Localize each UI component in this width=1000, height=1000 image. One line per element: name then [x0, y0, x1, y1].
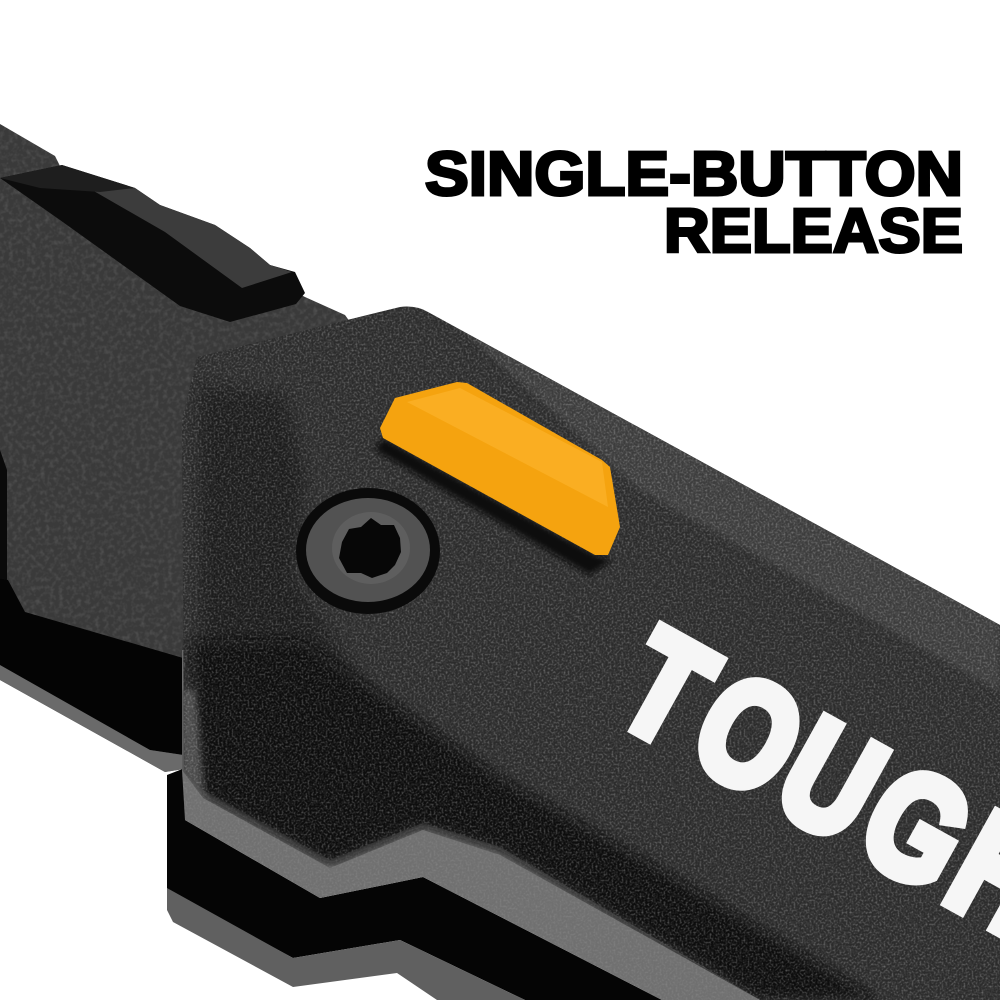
screw ring	[306, 498, 430, 602]
side notch shadow	[0, 450, 7, 580]
heading: RELEASE	[664, 197, 963, 266]
recess	[296, 488, 440, 614]
button body	[380, 382, 620, 555]
ring highlight	[332, 512, 410, 584]
blade carrier	[0, 124, 370, 772]
handle main face	[182, 307, 1000, 1000]
release button	[375, 382, 620, 575]
handle texture	[182, 307, 1000, 1000]
lower dark shadow band	[0, 578, 190, 756]
blade texture	[0, 124, 370, 772]
lower grey rim	[0, 665, 190, 772]
top ridge clip	[0, 165, 305, 322]
button shadow	[375, 438, 612, 575]
shaded facets	[182, 310, 1000, 1000]
screw	[296, 488, 440, 614]
heading: SINGLE-BUTTON	[425, 140, 963, 209]
grey edge texture	[182, 770, 760, 1000]
left rim highlight	[182, 690, 203, 795]
torx socket	[339, 518, 401, 578]
button top facet	[407, 388, 608, 507]
rear handle grey edge	[167, 888, 525, 1000]
rear knife body	[0, 124, 370, 772]
front handle	[182, 307, 1000, 1000]
heading	[425, 140, 963, 266]
lower shadow face	[190, 640, 880, 1000]
rear handle black layer	[167, 768, 662, 1000]
upper bevel	[440, 310, 1000, 692]
left bevel	[200, 385, 360, 680]
front handle grey edge	[182, 650, 760, 1000]
